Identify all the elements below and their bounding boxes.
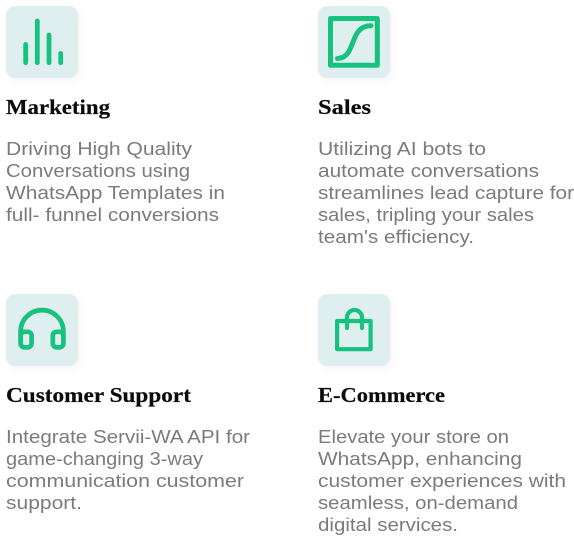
panel: e-commerce <box>318 294 566 535</box>
text block: e-commerce description: seamless, on-demand <box>318 493 518 513</box>
text block: e-commerce description: Elevate your store on <box>318 427 509 447</box>
panel: sales <box>318 6 574 247</box>
text block: marketing description: Conversations using <box>6 161 190 181</box>
heading: e-commerce: E-Commerce <box>318 383 445 407</box>
heading: sales: Sales <box>318 95 371 119</box>
text block: customer support description: communication customer <box>6 471 244 491</box>
text block: sales description: sales, tripling your sales <box>318 205 534 225</box>
text block: e-commerce description: digital services. <box>318 515 458 535</box>
icon: shopping bag <box>318 294 390 366</box>
icon: s-curve in square <box>318 6 390 78</box>
icon: headphones <box>6 294 78 366</box>
text block: sales description <box>318 139 574 247</box>
text block: marketing description: WhatsApp Templates in <box>6 183 225 203</box>
text block: customer support description <box>6 427 250 513</box>
panel: customer support <box>6 294 250 513</box>
icon: bar chart <box>6 6 78 78</box>
heading: customer support: Customer Support <box>6 383 191 407</box>
text block: sales description: Utilizing AI bots to <box>318 139 486 159</box>
text block: customer support description: support. <box>6 493 82 513</box>
text block: marketing description <box>6 139 225 225</box>
text block: sales description: streamlines lead capture for <box>318 183 574 203</box>
text block: customer support description: Integrate Servii-WA API for <box>6 427 250 447</box>
text block: e-commerce description: WhatsApp, enhancing <box>318 449 522 469</box>
heading: marketing: Marketing <box>6 95 111 119</box>
text block: customer support description: game-changing 3-way <box>6 449 203 469</box>
text block: e-commerce description <box>318 427 566 535</box>
text block: sales description: team's efficiency. <box>318 227 474 247</box>
panel: marketing <box>6 6 225 225</box>
text block: marketing description: full- funnel conversions <box>6 205 219 225</box>
text block: e-commerce description: customer experiences with <box>318 471 566 491</box>
text block: sales description: automate conversations <box>318 161 539 181</box>
text block: marketing description: Driving High Quality <box>6 139 192 159</box>
